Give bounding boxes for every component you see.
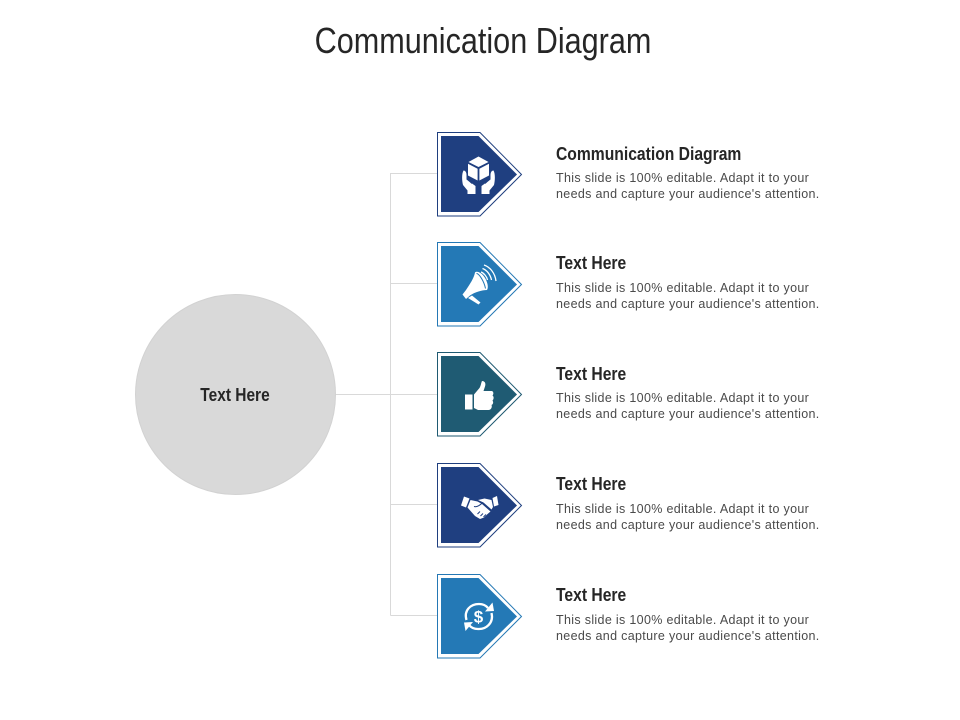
icon: dollar cycle marker: $ (474, 608, 484, 626)
title: Communication Diagram (315, 20, 651, 61)
icon: box in hands marker (437, 132, 522, 216)
text block: item 2: Text Here (556, 253, 626, 273)
central circle (135, 294, 336, 495)
text block: item 4: Text Here (556, 474, 626, 494)
text block: item 3 (556, 364, 820, 421)
icon: megaphone marker (437, 242, 522, 326)
text block: item 2: This slide is 100% editable. Adapt it to your needs and capture your audience's attention. (556, 281, 820, 311)
text block: item 4: This slide is 100% editable. Adapt it to your needs and capture your audience's attention. (556, 502, 820, 532)
text block: item 2 (556, 253, 820, 311)
circle label: Text Here (200, 385, 270, 405)
icon: handshake marker (437, 463, 522, 548)
icon: dollar cycle marker (437, 574, 522, 658)
text block: communication diagram (556, 144, 820, 201)
text block: communication diagram: Communication Diagram (556, 144, 741, 164)
text block: item 3: Text Here (556, 364, 626, 384)
text block: item 5: Text Here (556, 585, 626, 605)
text block: item 5 (556, 585, 820, 643)
icon: thumbs up marker (437, 352, 522, 436)
text block: item 4 (556, 474, 820, 532)
text block: communication diagram: This slide is 100% editable. Adapt it to your needs and capture your audience's attention. (556, 171, 820, 201)
text block: item 3: This slide is 100% editable. Adapt it to your needs and capture your audience's attention. (556, 391, 820, 421)
text block: item 5: This slide is 100% editable. Adapt it to your needs and capture your audience's attention. (556, 613, 820, 643)
